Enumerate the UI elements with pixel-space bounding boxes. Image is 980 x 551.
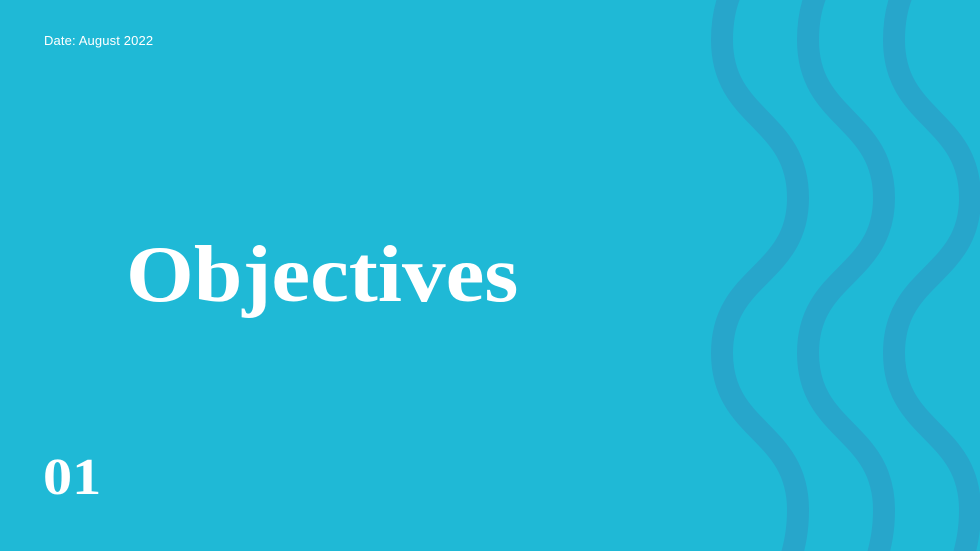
wave 3	[894, 0, 970, 551]
wave 2	[808, 0, 884, 551]
wave 1	[722, 0, 798, 551]
section number: 01	[43, 449, 101, 506]
title: Objectives	[126, 231, 518, 319]
date label: Date: August 2022	[44, 33, 153, 48]
